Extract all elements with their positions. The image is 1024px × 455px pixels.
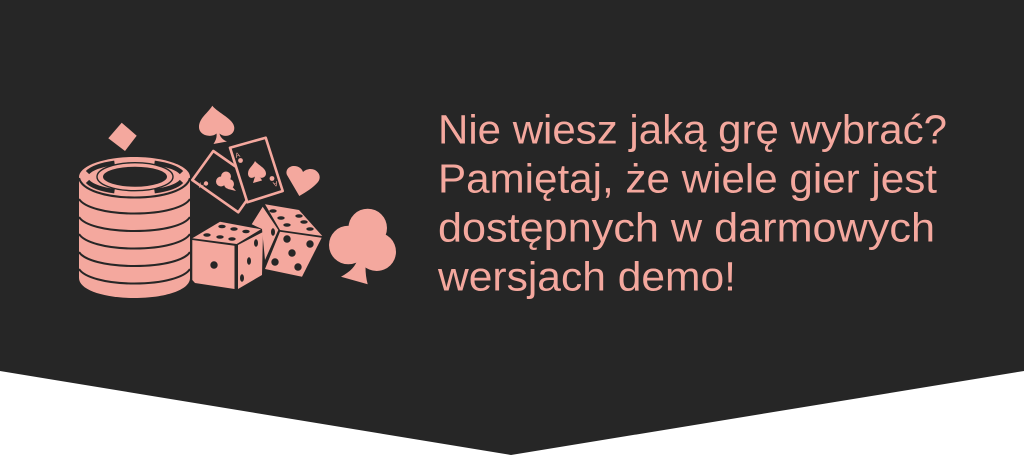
text block: demo message [437, 106, 947, 300]
icon: club [329, 209, 396, 284]
text block: demo message: wersjach demo! [437, 254, 736, 300]
playing card: ace of clubs: A [197, 180, 205, 189]
text block: demo message: Nie wiesz jaką grę wybrać? [438, 106, 947, 152]
playing card: ace of spades: A [235, 152, 241, 160]
icon: spade [199, 106, 234, 144]
icon: stack of poker chips [79, 157, 190, 298]
icon: die two [252, 204, 322, 277]
illustration: casino chips, cards and dice [79, 106, 396, 298]
playing card: ace of spades [230, 138, 283, 202]
text block: demo message: dostępnych w darmowych [438, 205, 935, 251]
icon: heart [286, 166, 320, 196]
text block: demo message: Pamiętaj, że wiele gier jest [438, 156, 938, 202]
icon: die one [192, 222, 263, 289]
playing card: ace of spades: A [272, 179, 278, 187]
playing card: ace of clubs [192, 151, 259, 212]
icon: diamond [108, 123, 137, 151]
